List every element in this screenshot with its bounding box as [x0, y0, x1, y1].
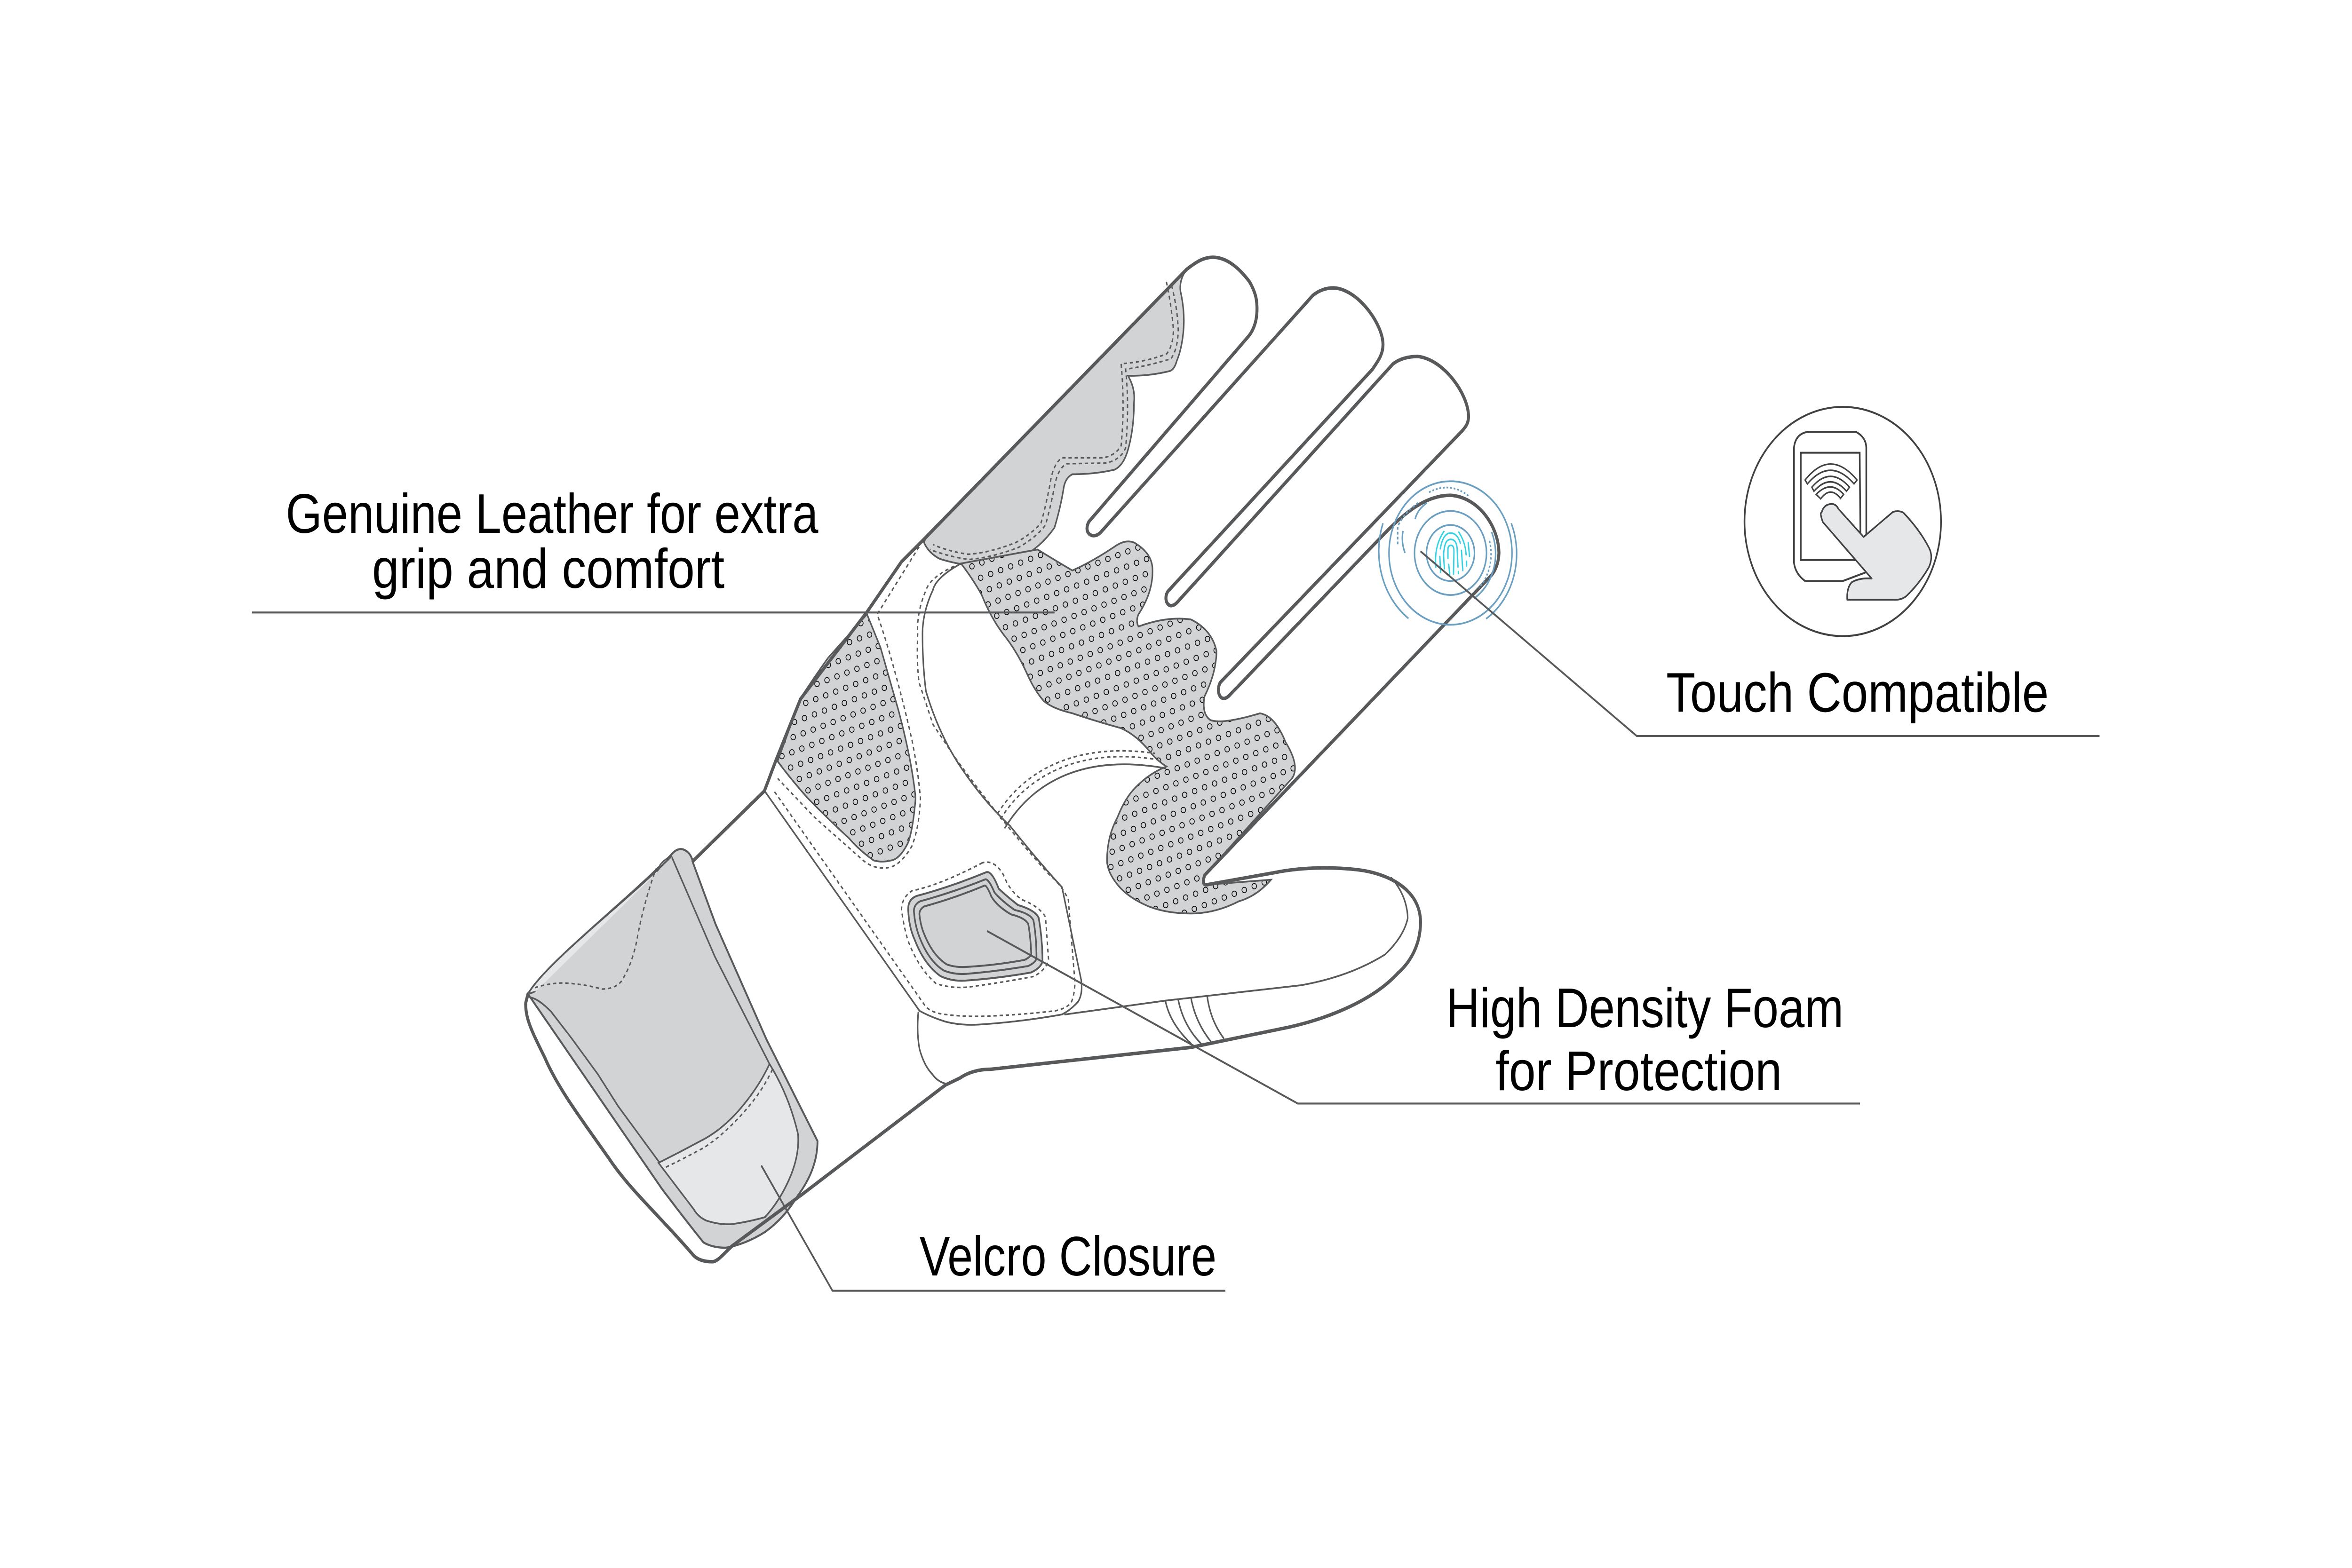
perforated mesh side panel [778, 614, 915, 862]
velcro closure tab [659, 1064, 798, 1224]
callout: genuine leather: grip and comfort [372, 538, 724, 600]
callout: touch compatible: Touch Compatible [1666, 662, 2049, 724]
perforated mesh palm panel [961, 541, 1295, 913]
high density foam pad [901, 862, 1049, 988]
callout: high density foam: High Density Foam [1446, 977, 1843, 1039]
wifi signal arcs [1805, 464, 1857, 499]
palm seams and stitching [764, 547, 1408, 1084]
wrist cuff strap [528, 849, 818, 1248]
callout: high density foam: for Protection [1495, 1040, 1782, 1102]
callout: velcro closure [761, 1165, 1225, 1291]
callout: genuine leather [252, 483, 1055, 612]
pointing hand [1821, 504, 1931, 600]
callout: velcro closure: Velcro Closure [920, 1226, 1216, 1288]
callout: touch compatible [1421, 551, 2099, 736]
callout: high density foam [987, 931, 1860, 1103]
glove illustration [526, 257, 1499, 1262]
icon: touch phone in circle [1745, 407, 1941, 636]
icon: fingerprint touch rings [1379, 481, 1517, 625]
phone screen [1801, 453, 1860, 560]
leather index finger patch [924, 269, 1186, 566]
icon circle [1745, 407, 1941, 636]
phone [1794, 432, 1866, 581]
glove outer outline [526, 257, 1499, 1262]
cuff main panel [530, 857, 798, 1224]
cuff upper light panel [528, 856, 672, 997]
callout: genuine leather: Genuine Leather for extra [286, 483, 818, 545]
